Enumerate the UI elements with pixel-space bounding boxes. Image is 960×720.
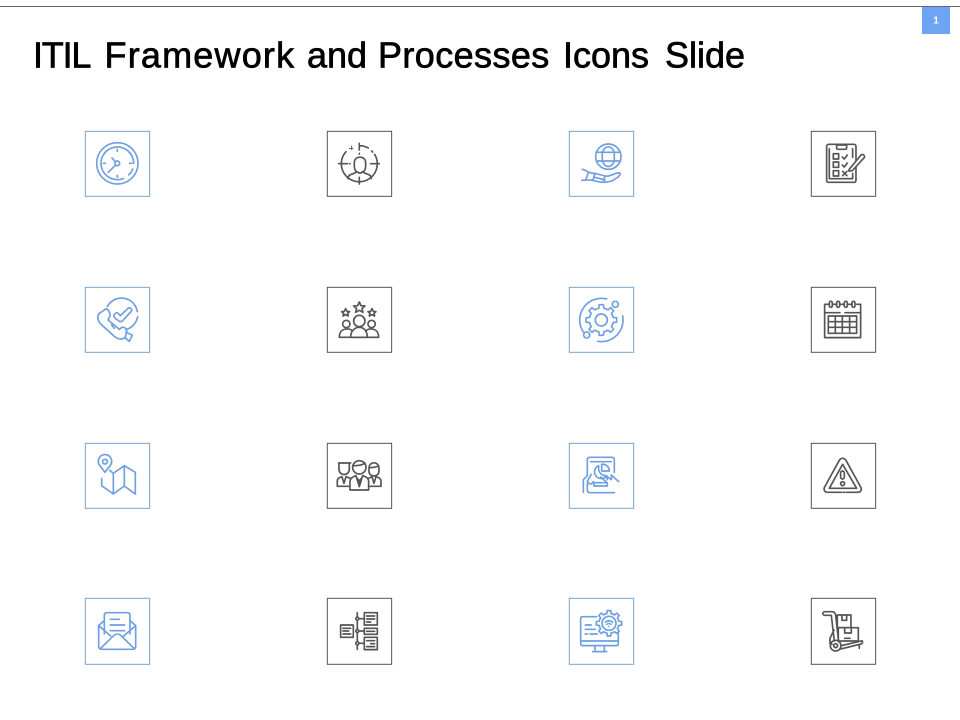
- top rule: [0, 6, 960, 7]
- icon tile: three business people: [327, 443, 392, 508]
- title: Icons: [563, 35, 649, 76]
- title: ITIL: [33, 35, 90, 76]
- icon tile: clock: [85, 131, 150, 196]
- icon tile: target on person: [327, 131, 392, 196]
- page number badge: 1: [933, 16, 939, 26]
- title: Slide: [665, 35, 745, 76]
- icon tile: phone with check: [85, 287, 150, 352]
- title: Framework: [104, 35, 295, 76]
- icon tile: gear orbit: [569, 287, 634, 352]
- icon tile: checklist clipboard: [811, 131, 876, 196]
- icon tile: hand truck with boxes: [811, 598, 876, 664]
- icon tile: tablet chart in hand: [569, 443, 634, 508]
- icon tile: calendar: [811, 287, 876, 352]
- title: Processes: [378, 35, 550, 76]
- page number badge: [922, 7, 950, 34]
- icon tile: document flow: [327, 598, 392, 664]
- icon tile: open envelope: [85, 598, 150, 664]
- icon tile: rated team: [327, 287, 392, 352]
- icon tile: map with pin: [85, 443, 150, 508]
- icon tile: monitor with wifi gear: [569, 598, 634, 664]
- icon tile: warning triangle: [811, 443, 876, 508]
- icon tile: globe in hand: [569, 131, 634, 196]
- title: and: [307, 35, 367, 76]
